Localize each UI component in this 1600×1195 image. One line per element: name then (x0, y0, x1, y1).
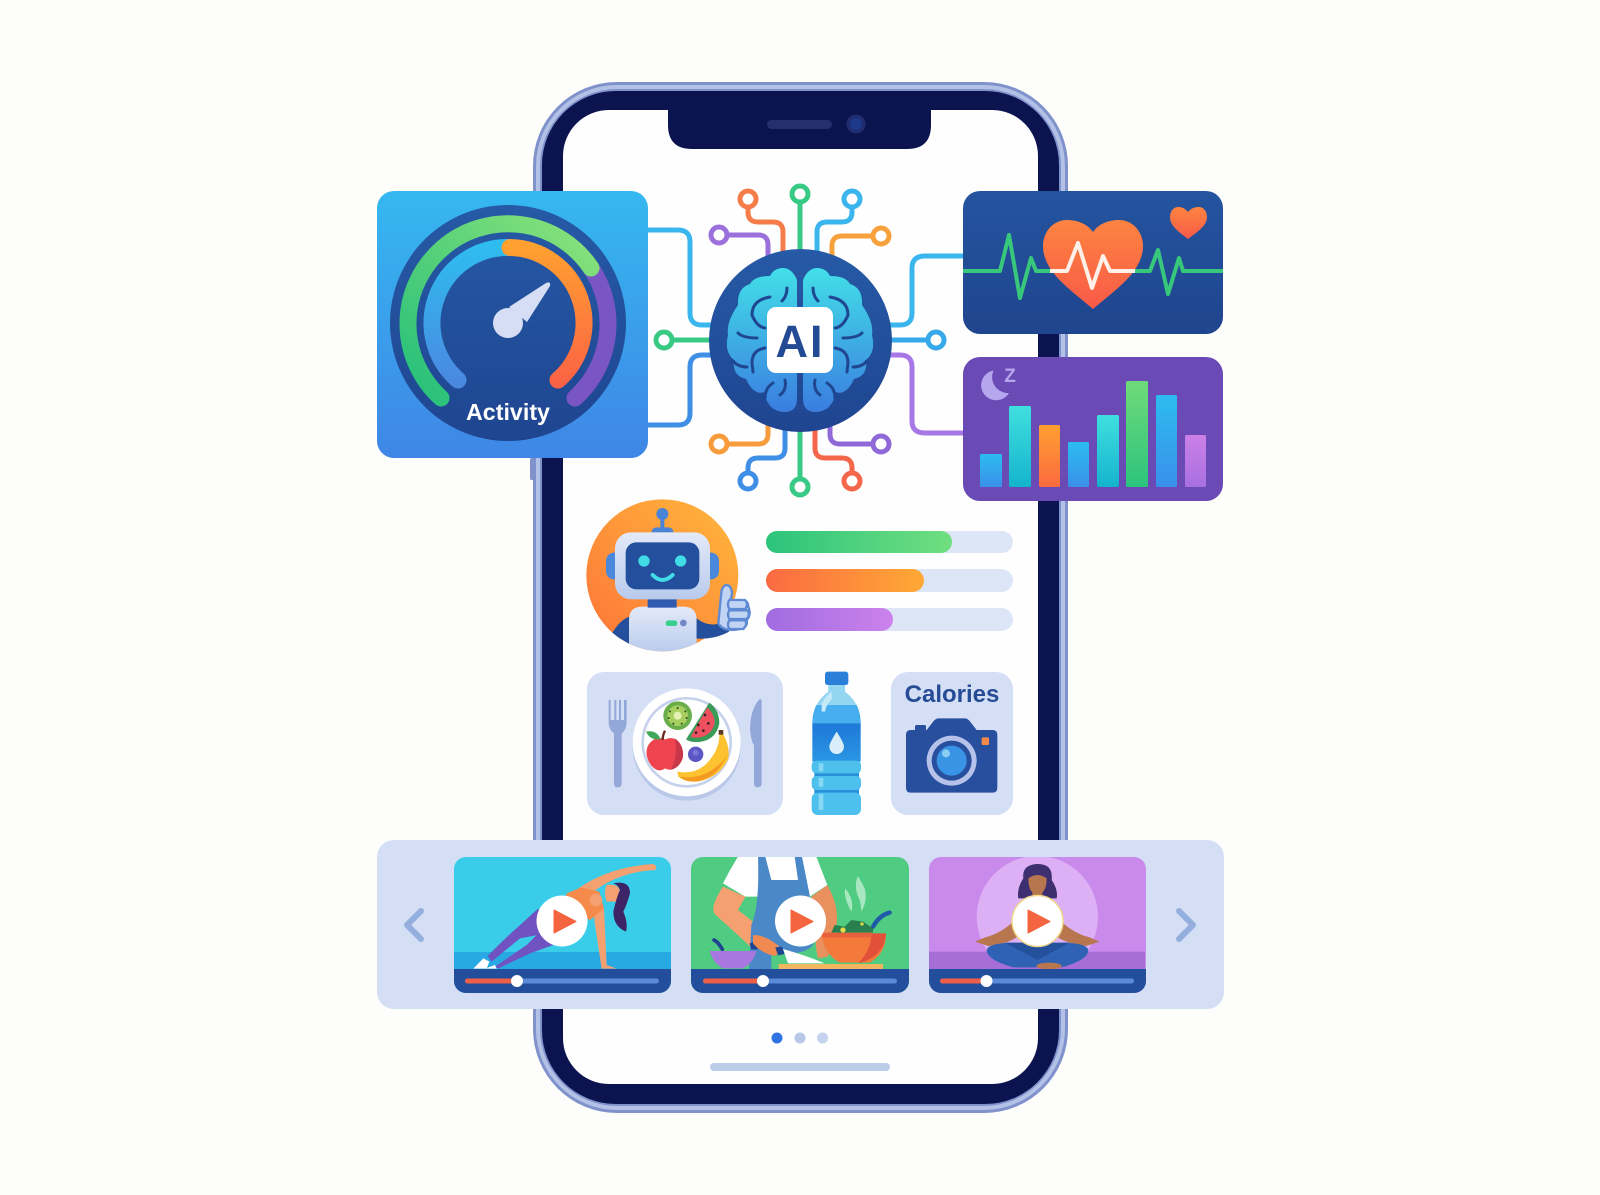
speaker (767, 120, 832, 129)
orange progress (766, 569, 1013, 592)
phone frame (530, 82, 1068, 1113)
camera body (906, 718, 997, 793)
smile (653, 575, 673, 580)
orange top-left node (740, 191, 783, 252)
play button 1 (536, 896, 588, 946)
robot body (612, 606, 718, 652)
z letter: Z (1004, 366, 1016, 387)
AI badge: AI (776, 316, 824, 367)
calories label: Calories (905, 681, 999, 708)
food plate card (587, 672, 783, 815)
blue lower-left node (740, 428, 785, 489)
progress bars (766, 531, 1013, 631)
carousel pagination dots (772, 1032, 828, 1044)
flash dot (982, 737, 989, 745)
bottom green node (792, 432, 808, 495)
video thumbnail: yoga side plank (454, 857, 671, 993)
blue right node (888, 332, 944, 348)
green progress (766, 531, 1013, 553)
sleep card (963, 357, 1223, 501)
orange lower-left node (711, 422, 768, 452)
orange upper-right node (832, 228, 889, 258)
side button (530, 458, 534, 480)
activity label: Activity (466, 399, 550, 425)
neck (648, 598, 677, 608)
play button 3 (1012, 896, 1063, 946)
left chevron (407, 911, 421, 939)
lens (927, 736, 977, 786)
blue arc (432, 247, 508, 380)
heart card connector (888, 256, 963, 325)
plate (633, 688, 741, 801)
moon icon (981, 370, 1009, 400)
red lower-right node (815, 428, 860, 489)
green arc (408, 224, 591, 398)
right arm (697, 618, 729, 639)
blueberry (688, 747, 703, 762)
bottle label (812, 723, 861, 762)
water bottle (812, 672, 861, 815)
purple progress (766, 608, 1013, 631)
video thumbnail: meditation (929, 856, 1146, 993)
watermelon (686, 703, 719, 742)
lower activity connector (648, 355, 712, 425)
needle (493, 282, 550, 338)
face screen (626, 542, 699, 589)
green left node (656, 332, 710, 348)
sleep card connector (888, 355, 963, 433)
purple arc (575, 268, 608, 398)
brain (727, 268, 873, 412)
water droplet (829, 732, 844, 754)
fork (609, 700, 627, 787)
orange arc (510, 248, 584, 380)
thumbs up hand (718, 585, 750, 630)
eyes (638, 555, 686, 567)
video thumbnail: cooking chef (691, 852, 909, 993)
bottle highlight (822, 692, 832, 712)
notch (668, 108, 931, 149)
sleep bar chart (980, 381, 1206, 487)
ECG line (963, 235, 1223, 298)
home indicator (710, 1063, 890, 1071)
progress track 2 (703, 975, 897, 987)
gauge dial (390, 205, 626, 441)
purple lower-right node (830, 422, 889, 452)
AI badge (767, 307, 833, 373)
camera (846, 114, 866, 134)
knife (750, 699, 762, 787)
purple left node (711, 227, 768, 258)
circuit lines and nodes (648, 186, 963, 495)
small heart (1170, 207, 1207, 239)
ears (606, 553, 719, 579)
play button 2 (775, 896, 826, 946)
video carousel panel (377, 840, 1224, 1009)
robot head (615, 532, 710, 599)
screen (563, 110, 1038, 1084)
kiwi (663, 701, 692, 730)
heart rate card (963, 191, 1223, 334)
apple (646, 731, 683, 770)
banana (677, 730, 729, 782)
progress track 1 (465, 975, 659, 987)
bottle base ribs (812, 760, 861, 815)
top green node (792, 186, 808, 250)
robot assistant avatar (586, 499, 750, 653)
calories camera card (891, 672, 1013, 815)
large heart (1043, 220, 1143, 309)
bottle cap (825, 672, 848, 685)
right chevron (1179, 911, 1193, 939)
activity connector (648, 230, 712, 325)
activity gauge card (377, 191, 648, 458)
AI brain hub (709, 249, 892, 432)
antenna (652, 508, 673, 532)
progress track 3 (940, 975, 1134, 987)
blue upper-right node (817, 191, 860, 252)
